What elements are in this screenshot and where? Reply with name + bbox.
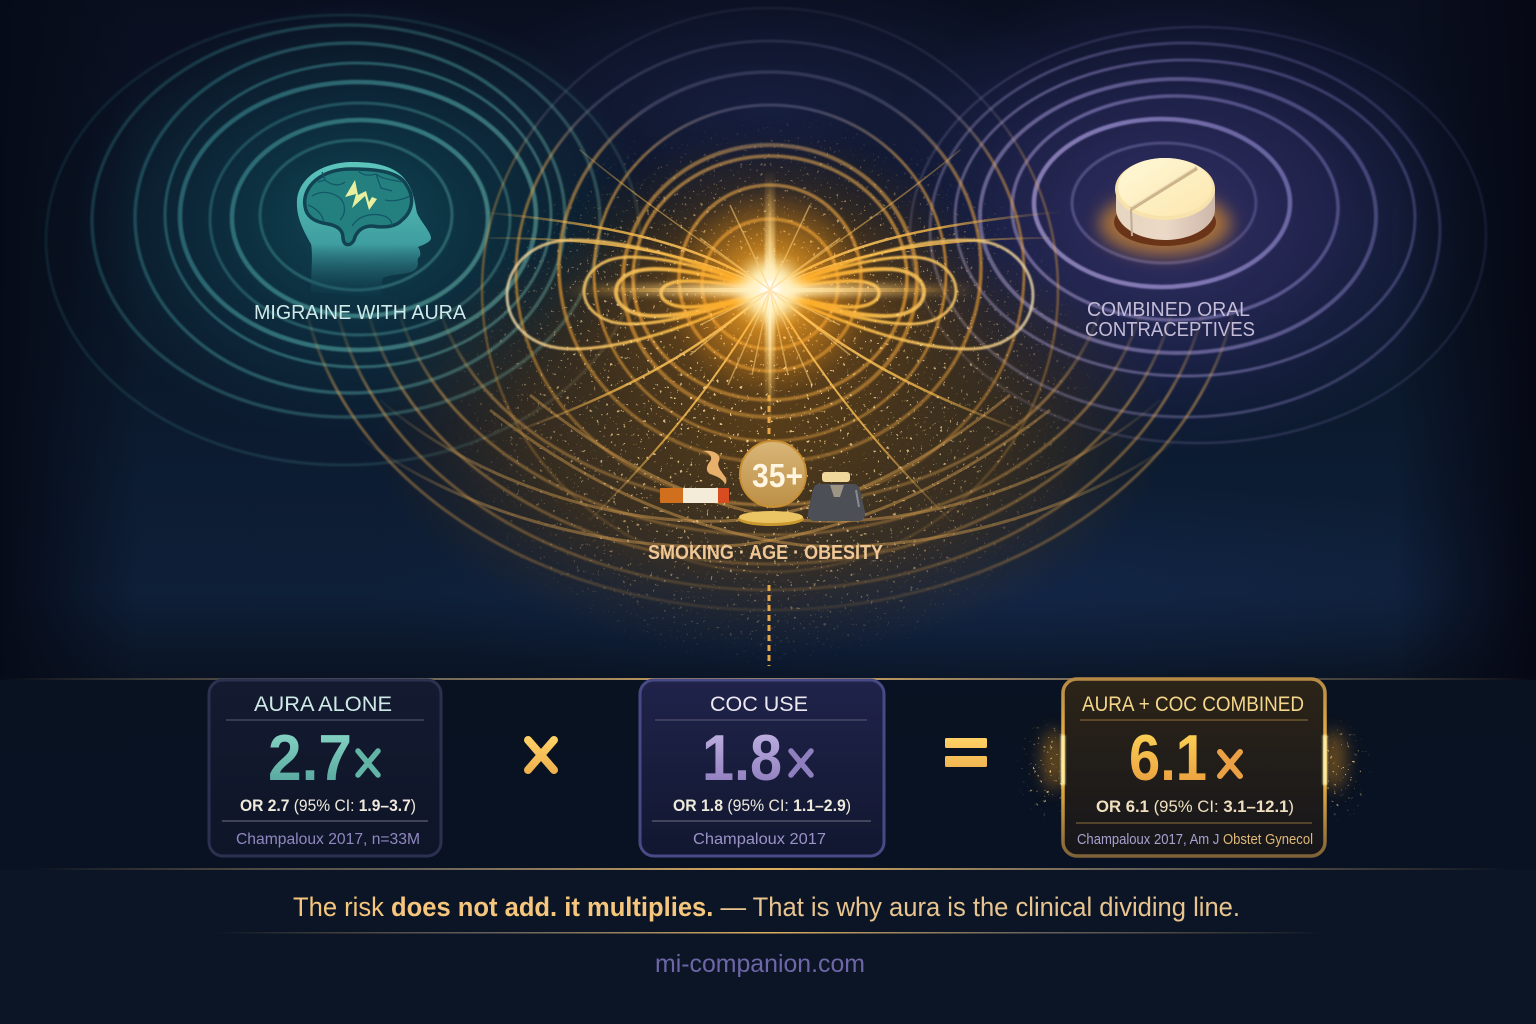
rule under tagline [215, 932, 1322, 934]
value: 2.7x: 2.7 [268, 721, 352, 794]
citation: Champaloux 2017 [693, 831, 826, 848]
lobes: left [507, 240, 770, 349]
icon: age 35+ coin: 35+ [752, 457, 803, 494]
heading: aura alone: AURA ALONE [254, 693, 392, 716]
label: risk modifiers: SMOKING · AGE · OBESITY [648, 542, 884, 564]
panel: aura alone [209, 680, 441, 856]
website: mi-companion.com [655, 950, 865, 978]
glow sparks beside result [1018, 720, 1371, 820]
lobes: right [770, 240, 1033, 349]
label: migraine: MIGRAINE WITH AURA [254, 302, 467, 324]
icon: age 35+ coin [738, 441, 806, 526]
value: 1.8x: 1.8 [702, 721, 782, 794]
value: 6.1x: 6.1 [1129, 721, 1207, 794]
panel: combined result [1061, 679, 1327, 856]
rings: central interaction waves [482, 8, 1058, 572]
icon: lightning bolt [345, 180, 377, 210]
label: contraceptives: CONTRACEPTIVES [1085, 319, 1255, 341]
citation: Champaloux 2017, Am J Obstet Gynecol [1077, 831, 1313, 848]
operator: times [528, 740, 554, 770]
icon: head with brain [297, 162, 431, 298]
rings: migraine aura waves [46, 15, 640, 465]
label: contraceptives: COMBINED ORAL [1087, 299, 1250, 321]
heading: coc use: COC USE [710, 693, 808, 716]
odds ratio: OR 2.7 (95% CI: 1.9–3.7) [240, 796, 416, 815]
operator: equals [945, 738, 987, 767]
citation: Champaloux 2017, n=33M [236, 831, 420, 848]
odds ratio: OR 6.1 (95% CI: 3.1–12.1) [1096, 797, 1294, 816]
sparks [450, 120, 1091, 662]
results band [0, 678, 1536, 870]
heading: combined: AURA + COC COMBINED [1082, 693, 1304, 716]
label: contraceptives [1085, 299, 1255, 341]
lower gold arcs [300, 0, 1240, 610]
crossing gold arcs [350, 395, 1190, 546]
icon: pill [1099, 158, 1231, 256]
starburst [560, 170, 980, 430]
field lines [480, 150, 1060, 520]
odds ratio: OR 1.8 (95% CI: 1.1–2.9) [673, 796, 851, 815]
rings: contraceptive waves [910, 27, 1486, 443]
panel: coc use [640, 680, 884, 856]
dotted connector [768, 395, 770, 666]
icon: cigarette [660, 451, 729, 503]
tagline: The risk does not add. it multiplies. — That is why aura is the clinical dividing line. [293, 892, 1240, 922]
icon: bag [808, 472, 865, 521]
